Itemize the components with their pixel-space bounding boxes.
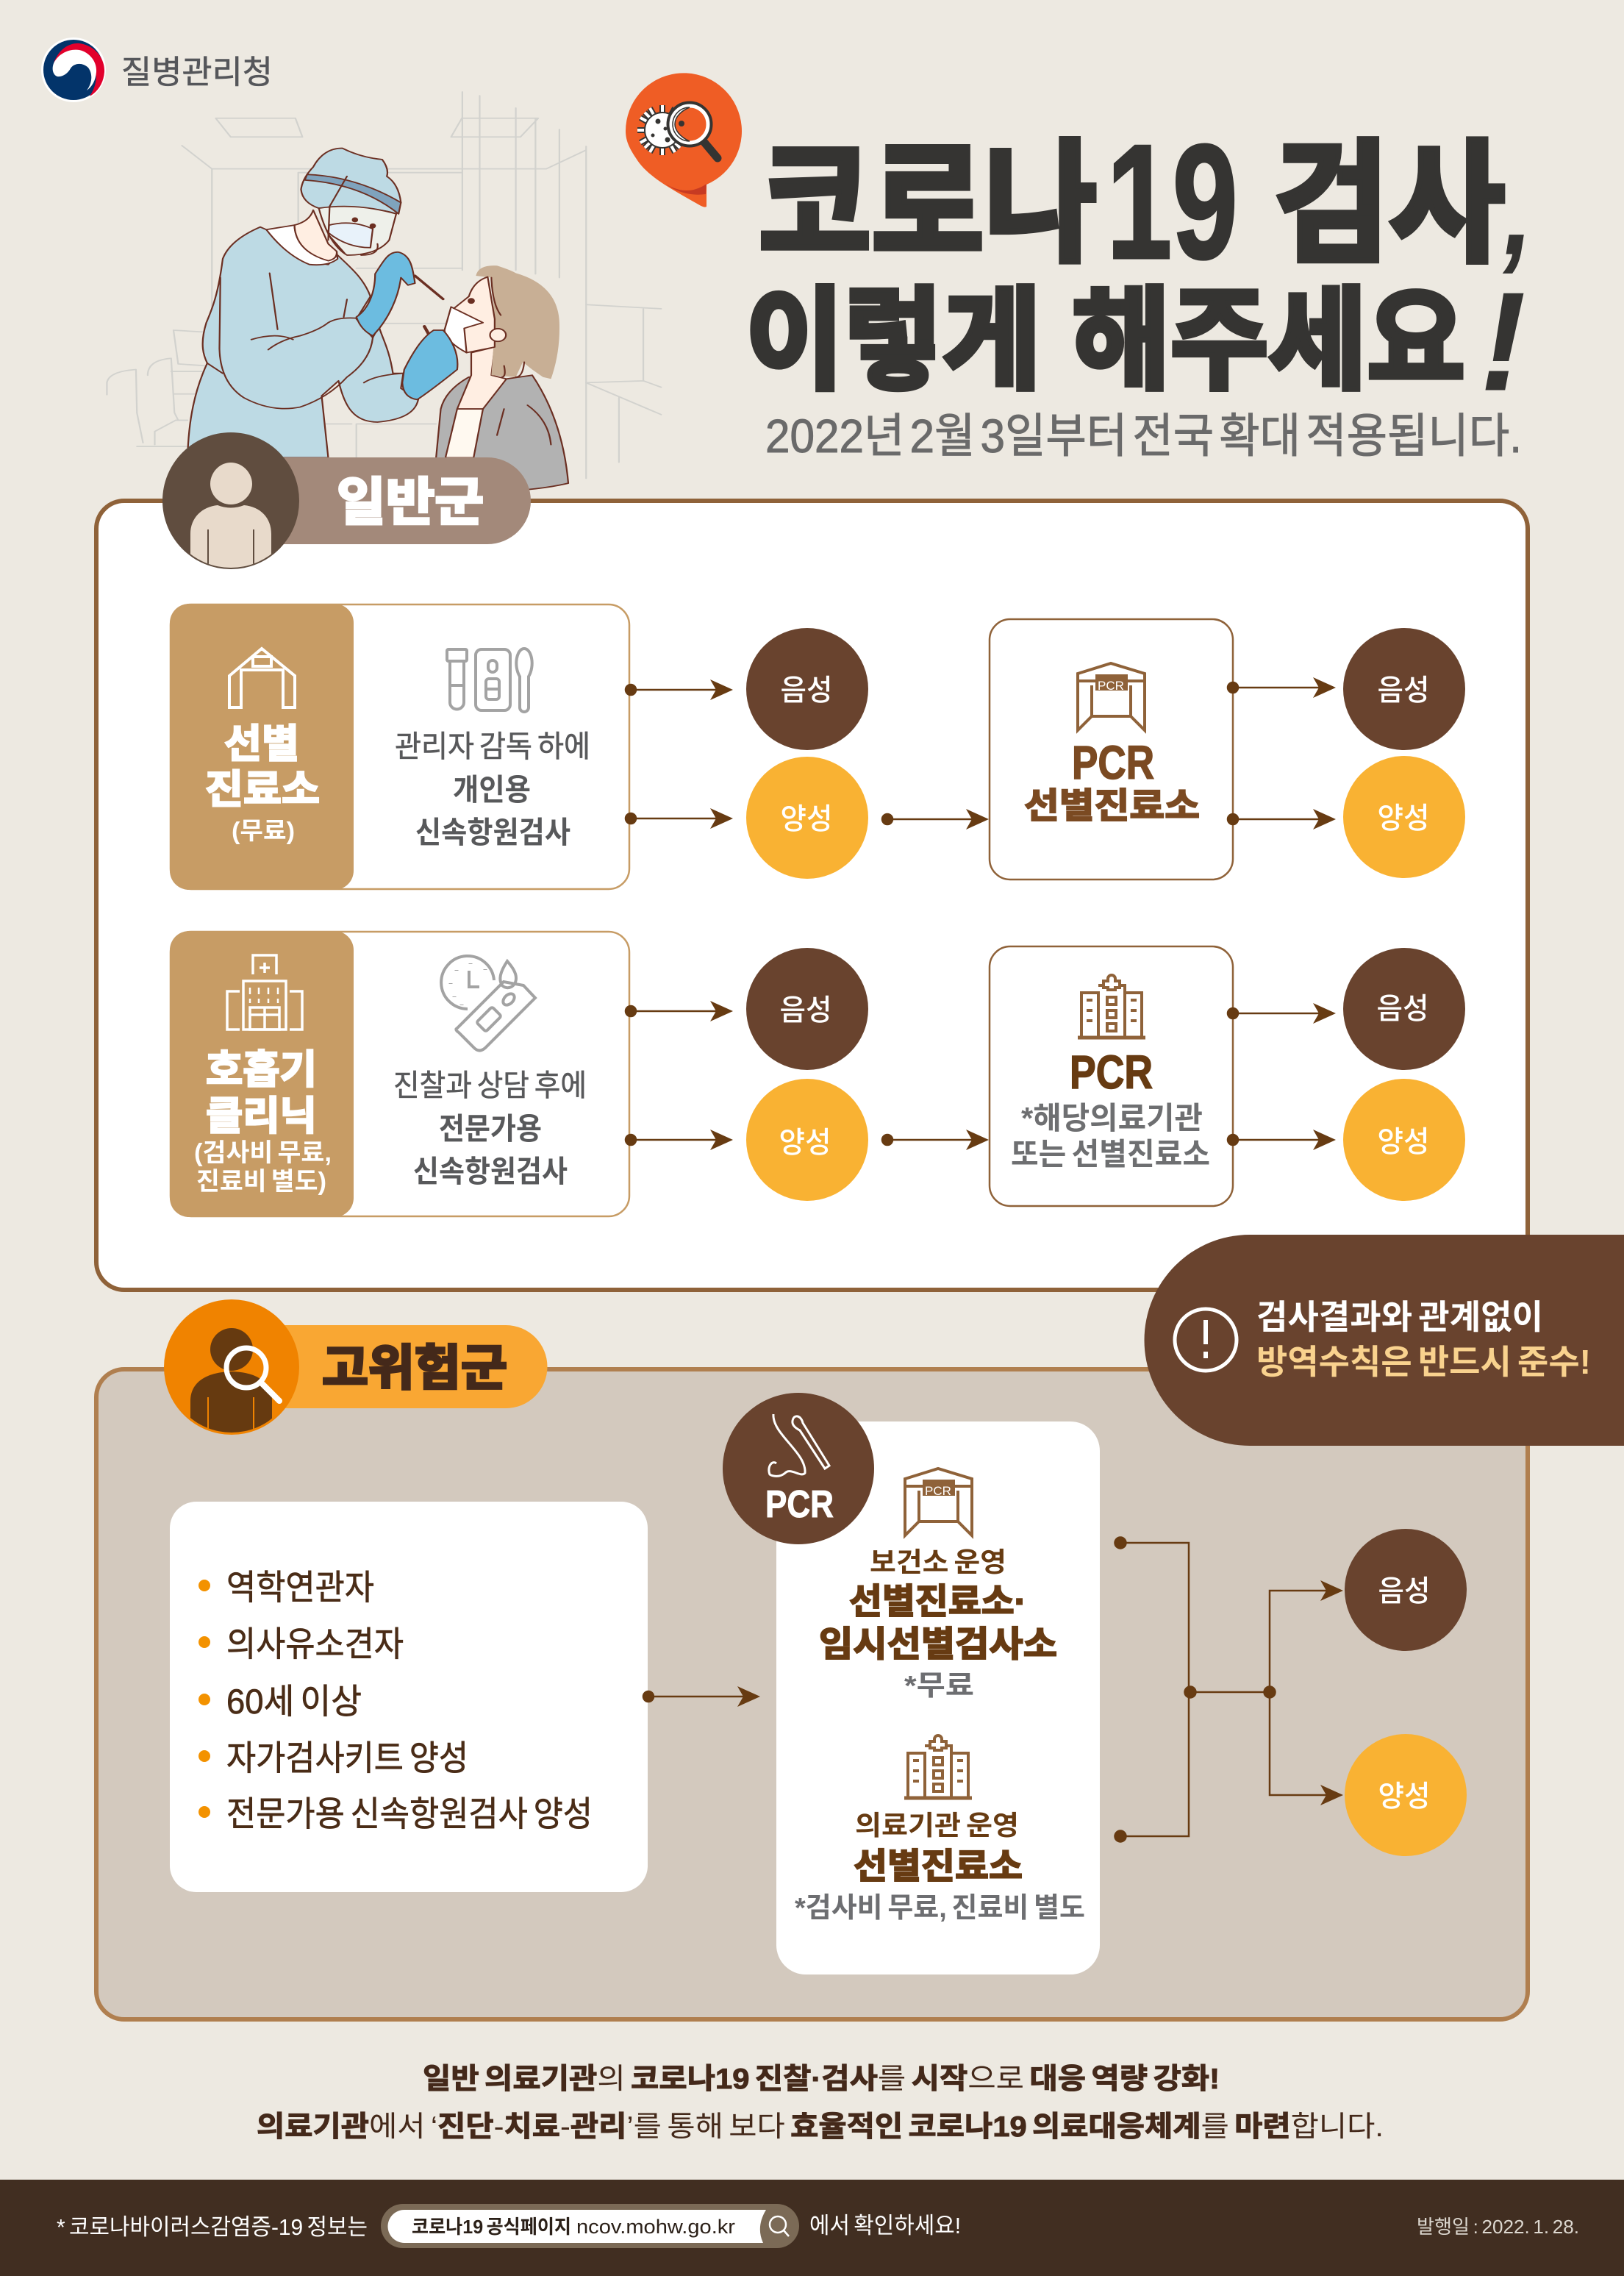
title: 해주세요 — [1072, 279, 1465, 404]
label: 호흡기 클리닉 — [194, 1048, 332, 1196]
subtitle: 2022년 2월 3일부터 전국 확대 적용됩니다. — [765, 410, 1522, 463]
arrow: list to PCR — [643, 1686, 760, 1707]
callout: 방역수칙 준수 — [1144, 1235, 1624, 1446]
list: 고위험군 대상: 전문가용 신속항원검사 양성 — [226, 1794, 593, 1833]
text: 보건소 운영: 임시선별검사소 — [819, 1625, 1057, 1664]
label: PCR — [1070, 1046, 1153, 1099]
list: 고위험군 대상: 자가검사키트 양성 — [226, 1738, 468, 1777]
box: PCR 검사기관 — [776, 1421, 1100, 1974]
label: 또는 선별진료소 — [1011, 1137, 1210, 1171]
pill heading: 고위험군 — [164, 1299, 547, 1441]
card: 호흡기 클리닉 — [170, 931, 629, 1217]
logo: 질병관리청 — [41, 38, 273, 102]
label: 선별진료소 — [1024, 787, 1200, 826]
callout: 방역수칙 준수: 검사결과와 관계없이 — [1256, 1298, 1543, 1336]
search box: ncov.mohw.go.kr — [576, 2216, 735, 2238]
icon: nose and swab — [769, 1414, 829, 1476]
text: 의료기관 운영: *검사비 무료, 진료비 별도 — [795, 1893, 1085, 1924]
icon: hospital — [904, 1735, 972, 1798]
label — [1011, 1046, 1210, 1171]
list: 고위험군 대상: 60세 이상 — [226, 1682, 362, 1721]
text: 의료기관 운영: 선별진료소 — [854, 1847, 1023, 1886]
result circles: 고위험군: 양성 — [1378, 1780, 1431, 1813]
text: 보건소 운영: *무료 — [904, 1671, 974, 1702]
icon: tent — [229, 649, 295, 707]
description text: 신속항원검사 — [413, 1155, 568, 1188]
list: 고위험군 대상: 역학연관자 — [226, 1568, 374, 1607]
pill heading: 일반군: 일반군 — [337, 474, 484, 531]
illustration: doctor testing a patient — [107, 92, 661, 491]
result circles: 고위험군: 음성 — [1378, 1575, 1431, 1608]
title: , — [1503, 141, 1532, 281]
label: PCR — [1072, 736, 1154, 789]
panel: 일반군 — [96, 501, 1528, 1290]
label: *해당의료기관 — [1021, 1101, 1203, 1135]
result circles: first test: 양성 — [779, 1127, 831, 1159]
result circles: PCR: 양성 — [1378, 802, 1429, 835]
closing statement: 의료기관에서 ‘진단-치료-관리’를 통해 보다 효율적인 코로나19 의료대응체계 를 마련합니다. — [257, 2111, 1384, 2143]
result circles: 고위험군 — [1345, 1529, 1467, 1856]
closing statement: 일반 의료기관 의 코로나19 진찰·검사 를 시작으로 대응 역량 강화! — [423, 2063, 1220, 2095]
title: 19 — [1106, 111, 1238, 293]
title: ! — [1481, 264, 1525, 420]
result circles: first test: 음성 — [781, 674, 832, 707]
logo: 질병관리청: 질병관리청 — [121, 54, 273, 90]
description text: 진찰과 상담 후에 — [393, 1069, 587, 1102]
room background lines — [107, 92, 661, 479]
description text: 신속항원검사 — [415, 816, 570, 849]
list: 고위험군 대상: 의사유소견자 — [226, 1624, 404, 1663]
magnifier — [670, 104, 718, 158]
text: 보건소 운영: 선별진료소· — [849, 1583, 1026, 1622]
patient — [436, 265, 568, 491]
search box — [381, 2204, 799, 2248]
icon: PCR tent — [905, 1469, 972, 1535]
icon: exclamation mark — [1175, 1309, 1237, 1371]
title: 검사 — [1274, 131, 1505, 279]
label: 선별 진료소: 진료소 — [205, 768, 320, 812]
result circles: PCR: 음성 — [1378, 674, 1429, 707]
search box: 코로나19 공식페이지 — [412, 2216, 571, 2238]
text: 보건소 운영: 보건소 운영 — [870, 1547, 1006, 1577]
result circles: first test: 양성 — [781, 803, 832, 835]
label: 호흡기 클리닉: 클리닉 — [206, 1094, 317, 1138]
label: 선별 진료소: (무료) — [232, 817, 295, 844]
text: 보건소 운영 — [819, 1547, 1057, 1702]
text: 의료기관 운영: 의료기관 운영 — [855, 1811, 1019, 1841]
result circles: first test — [746, 628, 868, 1201]
description text: 개인용 — [453, 773, 531, 807]
result circles: PCR: 양성 — [1378, 1126, 1429, 1158]
arrows: cards to results — [626, 679, 989, 1150]
icon: clinic building — [227, 955, 302, 1030]
icon: hospital — [1078, 975, 1145, 1038]
title: 이렇게 — [745, 279, 1041, 404]
card: 선별진료소 — [170, 604, 629, 890]
connector: PCR to results — [1115, 1537, 1343, 1841]
label: 선별 진료소 — [205, 722, 320, 844]
footer bar — [0, 2180, 1624, 2276]
virus — [637, 105, 687, 155]
description text — [393, 1069, 587, 1188]
label — [1024, 736, 1200, 826]
description text: 관리자 감독 하에 — [395, 729, 590, 763]
icon: person with magnifier — [190, 1328, 279, 1441]
box: PCR 해당의료기관 — [990, 946, 1233, 1206]
callout: 방역수칙 준수: 방역수칙은 반드시 준수! — [1256, 1343, 1591, 1381]
result circles: PCR — [1343, 628, 1465, 1201]
panel: 고위험군 — [96, 1369, 1528, 2019]
title: 코로나 — [759, 131, 1097, 279]
result circles: first test: 음성 — [779, 994, 832, 1027]
footer bar: 에서 확인하세요! — [809, 2213, 961, 2238]
icon: PCR tent — [1078, 663, 1145, 730]
icon: clock and test strip — [441, 956, 535, 1050]
text: 의료기관 운영 — [795, 1811, 1085, 1924]
badge: PCR nose swab — [723, 1393, 874, 1544]
label: 호흡기 클리닉: 진료비 별도) — [196, 1168, 326, 1196]
box: PCR 선별진료소 — [990, 619, 1233, 880]
description text: 전문가용 — [439, 1112, 542, 1146]
icon: person — [190, 463, 271, 574]
label: 선별 진료소: 선별 — [224, 722, 299, 766]
pill heading: 고위험군: 고위험군 — [322, 1341, 507, 1395]
description text — [395, 729, 590, 849]
title — [745, 111, 1532, 420]
arrows: PCR to results — [1228, 677, 1336, 1150]
footer bar: * 코로나바이러스감염증-19 정보는 — [57, 2214, 368, 2240]
result circles: PCR: 음성 — [1376, 993, 1429, 1025]
pill heading: 일반군 — [162, 432, 531, 574]
icon: magnifier — [770, 2216, 789, 2236]
icon: PCR tent: PCR — [1098, 679, 1124, 693]
label: 호흡기 클리닉: 호흡기 — [206, 1048, 317, 1092]
icon: test kit — [447, 649, 532, 712]
icon: PCR tent: PCR — [925, 1484, 951, 1498]
icon: orange speech bubble with virus and magnifier — [626, 73, 742, 207]
doctor — [187, 149, 457, 457]
badge: PCR nose swab: PCR — [765, 1483, 834, 1526]
closing statement — [257, 2063, 1384, 2143]
list: 고위험군 대상 — [170, 1502, 648, 1892]
label: 호흡기 클리닉: (검사비 무료, — [194, 1139, 332, 1167]
footer bar: 발행일 : 2022. 1. 28. — [1417, 2216, 1579, 2238]
